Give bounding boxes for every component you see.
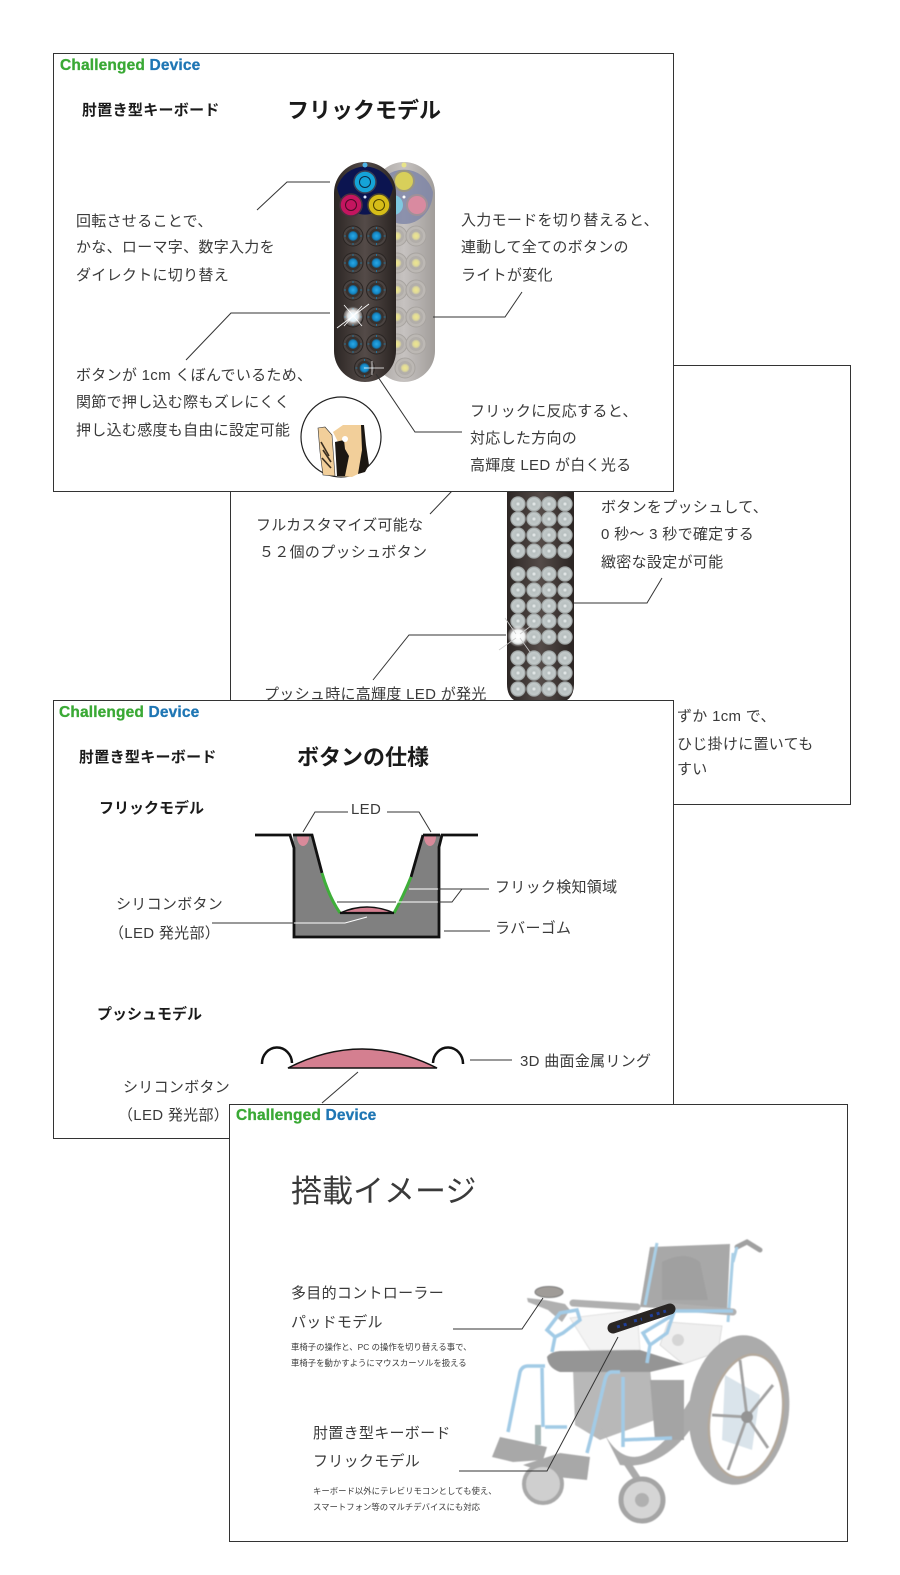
- label: silicon button (push): [118, 1072, 358, 1124]
- text: controller pad: [291, 1284, 472, 1368]
- label: rubber: ラバーゴム: [495, 919, 571, 937]
- leader lines: [373, 491, 662, 680]
- panel: button spec: [54, 700, 674, 1138]
- text: rotation: ダイレクトに切り替え: [76, 267, 229, 284]
- heading: 搭載イメージ: [291, 1174, 476, 1209]
- logo: Challenged Device: [236, 1107, 377, 1124]
- flick keyboard: active dark device: [334, 162, 396, 382]
- text: controller pad: 車椅子の操作と、PC の操作を切り替える事で、: [291, 1342, 472, 1352]
- text: flick response: 対応した方向の: [470, 430, 577, 447]
- label: metal ring: 3D 曲面金属リング: [520, 1053, 651, 1070]
- text: recessed button: 関節で押し込む際もズレにくく: [76, 394, 290, 411]
- text: rotation: 回転させることで、: [76, 213, 213, 230]
- label: flick detection area: フリック検知領域: [495, 879, 617, 896]
- leader lines: [453, 1298, 618, 1471]
- text: customizable buttons: [256, 517, 427, 561]
- text: rotation: かな、ローマ字、数字入力を: [76, 239, 275, 256]
- text: push timing: 緻密な設定が可能: [601, 554, 723, 571]
- label: push model: プッシュモデル: [97, 1005, 202, 1023]
- text: recessed button: 押し込む感度も自由に設定可能: [76, 422, 290, 439]
- flick keyboard: inactive grey device: [373, 162, 435, 382]
- text: input mode: 連動して全てのボタンの: [461, 239, 629, 256]
- icon: finger pressing: [301, 397, 381, 477]
- text: thickness: すい: [677, 761, 708, 778]
- diagram: flick button cross-section: [255, 835, 478, 937]
- panel: installation image: [230, 1104, 848, 1542]
- text: input mode: 入力モードを切り替えると、: [461, 212, 659, 229]
- logo: Challenged Device: [59, 704, 200, 721]
- icon: sparkle on flick key: [364, 361, 384, 375]
- icon: sparkle on button: [337, 304, 369, 328]
- text: customizable buttons: フルカスタマイズ可能な: [256, 517, 423, 534]
- text: armrest keyboard: キーボード以外にテレビリモコンとしても使え、: [313, 1486, 497, 1496]
- push keyboard device: [507, 490, 574, 703]
- text: push timing: [601, 499, 768, 571]
- wheelchair illustration: [492, 1242, 797, 1521]
- label: silicon button (push): シリコンボタン: [123, 1079, 230, 1096]
- text: LED emission: プッシュ時に高輝度 LED が発光: [264, 686, 487, 703]
- text: input mode: [461, 212, 659, 284]
- text: armrest keyboard: スマートフォン等のマルチデバイスにも対応: [313, 1502, 481, 1512]
- text: recessed button: [76, 367, 312, 439]
- label: silicon button (push): （LED 発光部）: [118, 1107, 229, 1124]
- label: rubber: [444, 919, 571, 937]
- text: input mode: ライトが変化: [461, 267, 553, 284]
- subtitle: 肘置き型キーボード: [82, 102, 220, 119]
- text: controller pad: 多目的コントローラー: [291, 1284, 444, 1302]
- text: flick response: 高輝度 LED が白く光る: [470, 457, 631, 474]
- panel: push model: [230, 366, 850, 804]
- heading: フリックモデル: [287, 98, 441, 123]
- label: silicon button: [109, 896, 367, 942]
- text: customizable buttons: ５２個のプッシュボタン: [259, 544, 427, 561]
- text: thickness: [677, 708, 814, 778]
- subtitle: 肘置き型キーボード: [79, 749, 217, 766]
- label: LED: LED: [351, 801, 381, 818]
- label: LED: [303, 801, 431, 832]
- text: thickness: ずか 1cm で、: [677, 708, 776, 725]
- label: silicon button: シリコンボタン: [116, 896, 223, 913]
- logo: Challenged Device: [60, 57, 201, 74]
- panel: flick model: [54, 54, 674, 492]
- heading: ボタンの仕様: [297, 745, 429, 770]
- text: controller pad: パッドモデル: [291, 1313, 383, 1331]
- text: recessed button: ボタンが 1cm くぼんでいるため、: [76, 367, 312, 384]
- text: armrest keyboard: [313, 1425, 497, 1512]
- text: rotation: [76, 213, 275, 284]
- text: flick response: [470, 403, 638, 474]
- text: armrest keyboard: 肘置き型キーボード: [313, 1425, 451, 1442]
- text: armrest keyboard: フリックモデル: [313, 1452, 420, 1470]
- text: thickness: ひじ掛けに置いても: [677, 736, 814, 753]
- text: controller pad: 車椅子を動かすようにマウスカーソルを扱える: [291, 1358, 467, 1368]
- label: flick model: フリックモデル: [99, 799, 204, 817]
- armrest keyboard on wheelchair: [613, 1309, 670, 1328]
- label: flick detection area: [337, 879, 617, 902]
- icon: LED sparkle: [499, 618, 531, 652]
- leader lines: [186, 182, 522, 432]
- text: push timing: 0 秒～ 3 秒で確定する: [601, 526, 754, 543]
- label: silicon button: （LED 発光部）: [109, 925, 220, 942]
- diagram: push button cross-section: [262, 1048, 463, 1068]
- text: flick response: フリックに反応すると、: [470, 403, 638, 420]
- text: push timing: ボタンをプッシュして、: [601, 499, 768, 516]
